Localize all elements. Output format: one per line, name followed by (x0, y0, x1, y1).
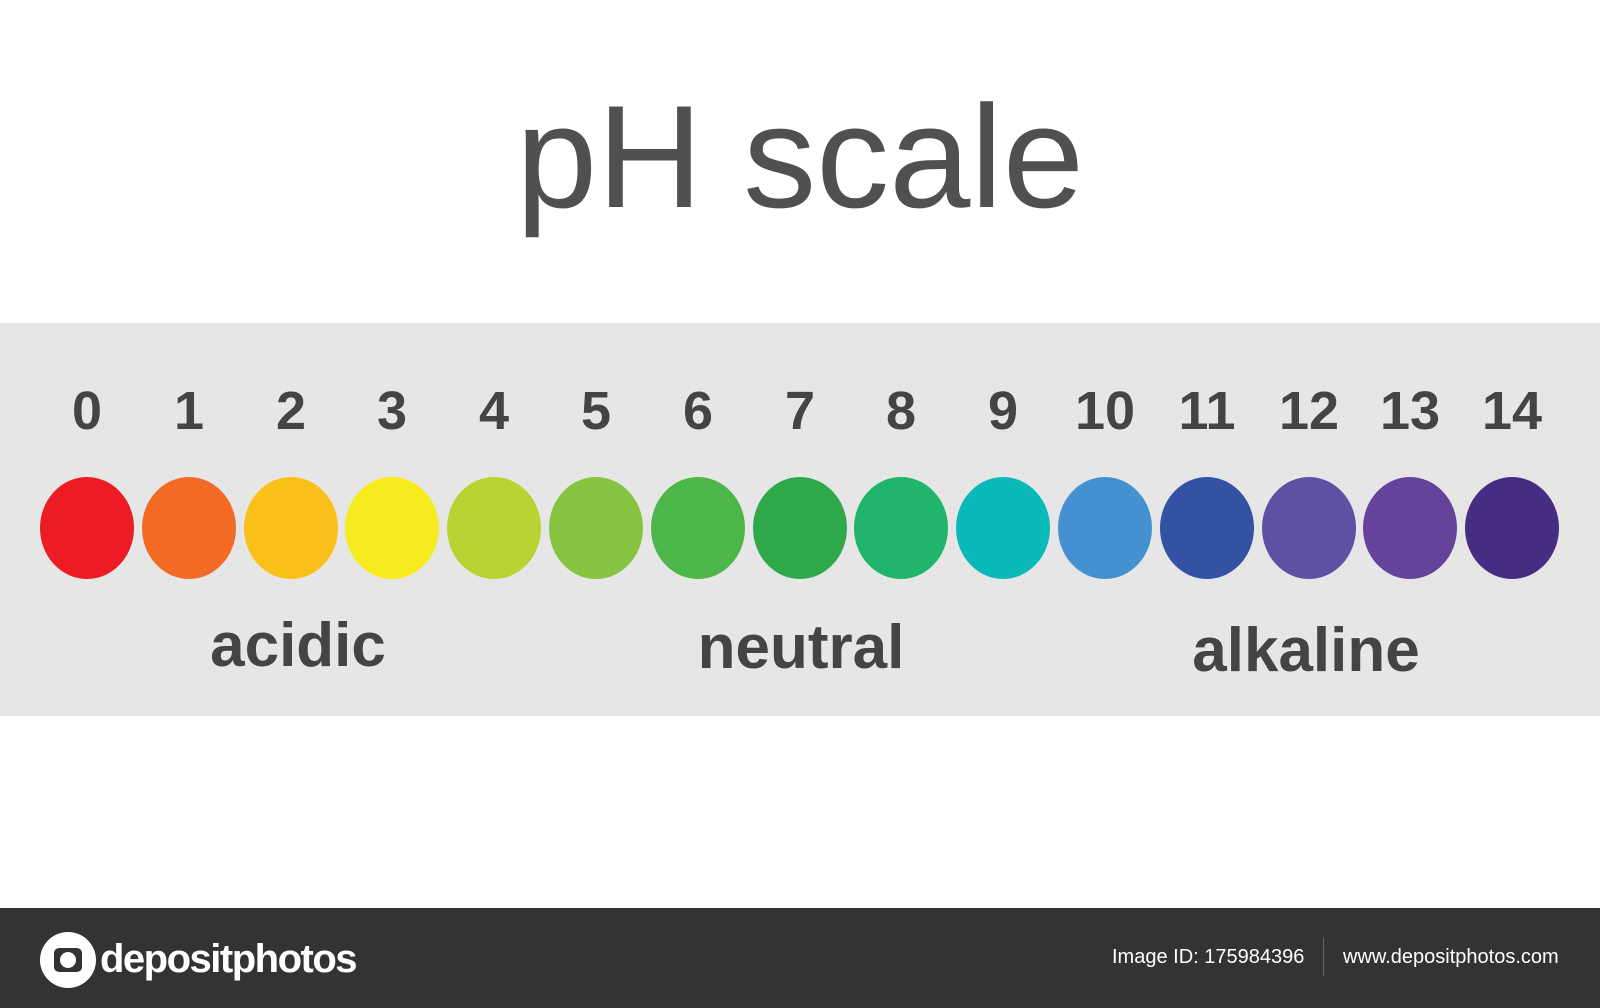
numbers: 7 (785, 381, 815, 441)
label: neutral: neutral (698, 613, 904, 682)
panel: scale band (0, 323, 1600, 716)
logo text: depositphotos (100, 937, 356, 981)
numbers: 13 (1380, 381, 1440, 441)
numbers: 10 (1075, 381, 1135, 441)
numbers: 12 (1279, 381, 1339, 441)
label: acidic: acidic (210, 611, 386, 680)
numbers: 1 (174, 381, 204, 441)
color circles (40, 477, 1559, 579)
numbers: 5 (581, 381, 611, 441)
website: www.depositphotos.com (1343, 946, 1559, 968)
numbers: 0 (72, 381, 102, 441)
numbers: 6 (683, 381, 713, 441)
numbers (72, 381, 1542, 441)
numbers: 14 (1482, 381, 1542, 441)
label: alkaline: alkaline (1192, 616, 1420, 685)
numbers: 8 (886, 381, 916, 441)
numbers: 4 (479, 381, 509, 441)
numbers: 11 (1178, 381, 1236, 441)
icon: logo camera (40, 932, 96, 988)
image id: Image ID: 175984396 (1112, 946, 1304, 968)
numbers: 9 (988, 381, 1018, 441)
numbers: 3 (377, 381, 407, 441)
title: pH scale (516, 75, 1084, 238)
numbers: 2 (276, 381, 306, 441)
footer (0, 908, 1600, 1008)
